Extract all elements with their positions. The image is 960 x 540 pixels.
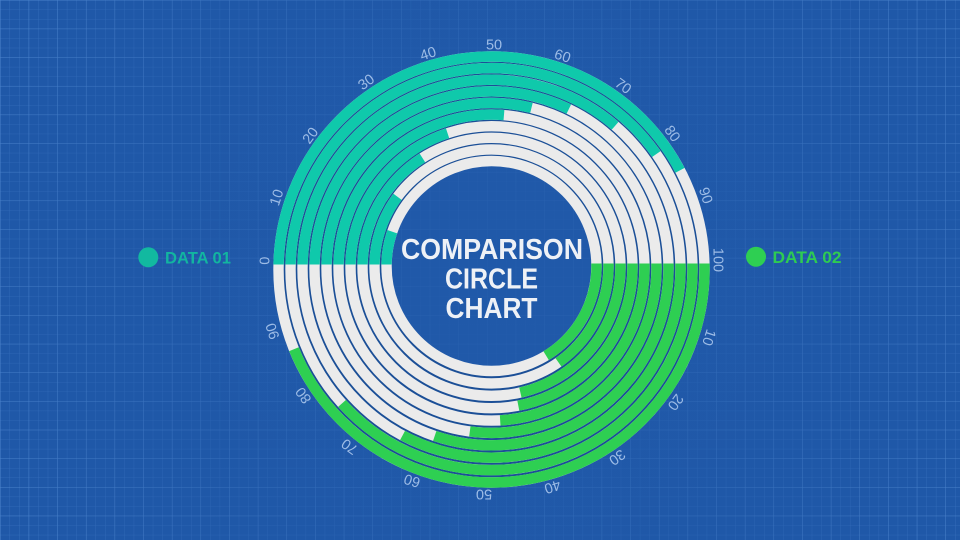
scale labels: data 02: 90 [263, 321, 283, 341]
chart: comparison circle [266, 44, 717, 495]
ring 1 [266, 44, 717, 495]
scale labels: data 02: 10 [698, 327, 718, 347]
scale labels: data 01: 90 [695, 186, 715, 206]
scale labels: data 01: 10 [267, 188, 287, 208]
scale labels: data 01: 60 [552, 47, 572, 67]
ring 5 [316, 93, 667, 443]
scale labels: data 02: 80 [293, 384, 315, 406]
scale labels: data 02: 40 [542, 476, 562, 496]
scale labels: data 01: 50 [486, 38, 502, 54]
scale labels: data 01: 100 [709, 248, 725, 272]
ring 4 [304, 81, 679, 456]
scale labels: data 01: 70 [611, 75, 634, 98]
scale labels: data 01: 20 [300, 125, 322, 147]
title: COMPARISON [401, 234, 583, 266]
scale labels: data 02: 60 [402, 470, 422, 490]
ring 10 [380, 155, 603, 377]
scale labels: data 02: 50 [476, 486, 492, 502]
scale labels: data 02: 30 [605, 445, 628, 468]
scale labels: data 01: 40 [418, 44, 438, 64]
scale labels: data 01: 0 [258, 257, 274, 265]
legend: data 02: DATA 02 [772, 248, 842, 267]
ring 9 [367, 142, 616, 391]
ring 8 [355, 130, 628, 404]
scale labels: data 02 [263, 321, 718, 502]
title: CHART [446, 293, 538, 325]
legend: data 01: DATA 01 [165, 248, 231, 267]
title: CIRCLE [445, 264, 538, 296]
scale labels: data 01 [258, 38, 725, 272]
title [401, 234, 583, 325]
scale labels: data 01: 80 [660, 123, 683, 145]
scale labels: data 01: 30 [355, 71, 378, 94]
ring 3 [291, 68, 692, 469]
legend: data 01 [138, 247, 231, 267]
ring 6 [329, 105, 654, 430]
ring 7 [342, 118, 641, 417]
legend: data 02 [746, 247, 842, 267]
scale labels: data 02: 70 [339, 435, 361, 457]
ring 2 [278, 56, 705, 482]
scale labels: data 02: 20 [664, 390, 686, 413]
